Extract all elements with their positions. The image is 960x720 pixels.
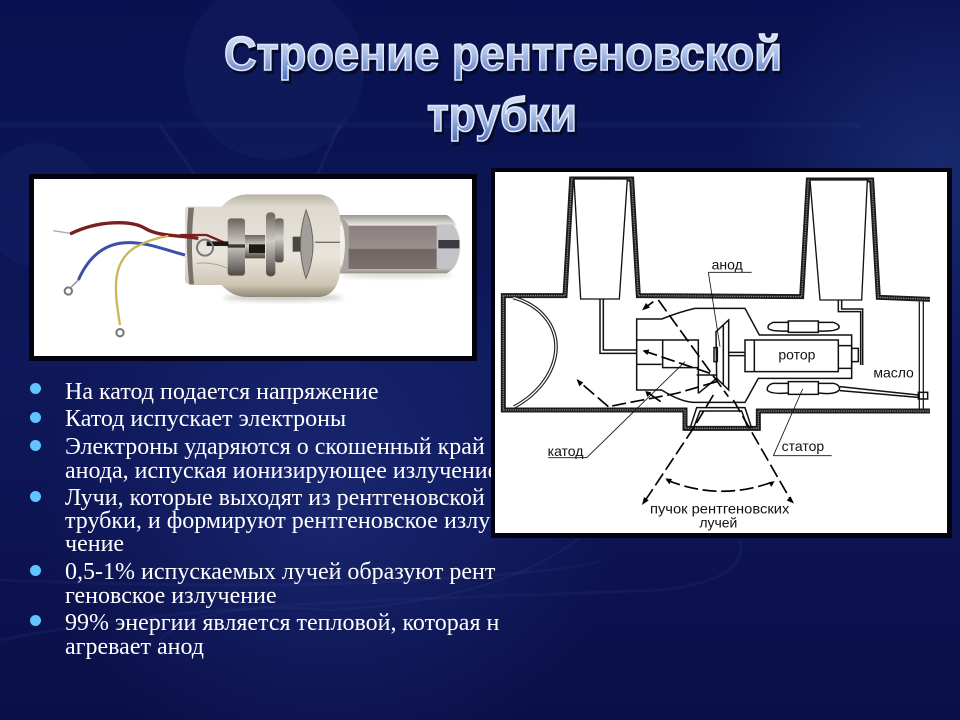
labels: пучок рентгеновских [650, 500, 789, 516]
bullet 2: Катод испускает электроны [65, 406, 346, 432]
bullet 6: агревает анод [65, 634, 204, 660]
cable sockets [574, 179, 867, 300]
bullet 5: геновское излучение [65, 583, 277, 609]
inner tube and components [600, 299, 928, 428]
title [224, 28, 784, 145]
labels: анод [712, 256, 743, 272]
bullet 3: Электроны ударяются о скошенный край [65, 434, 485, 460]
main glass body [185, 194, 340, 297]
bullet 1: На катод подается напряжение [65, 379, 378, 405]
bullet 6: 99% энергии является тепловой, которая н [65, 610, 499, 636]
bullet 4: трубки, и формируют рентгеновское излу [65, 508, 490, 534]
bullet 3: анода, испуская ионизирующее излучение [65, 458, 498, 484]
bullet list [30, 379, 499, 660]
labels: ротор [778, 346, 816, 362]
labels: статор [782, 438, 824, 454]
title: Строение рентгеновской [224, 28, 782, 81]
right glass [337, 215, 461, 273]
bullet 5: 0,5-1% испускаемых лучей образуют рент [65, 559, 495, 585]
labels: лучей [699, 514, 737, 530]
bullet 4: чение [65, 531, 124, 557]
wires [53, 223, 198, 336]
diagram: x-ray tube schematic [491, 168, 952, 538]
labels: катод [548, 443, 583, 459]
labels: масло [873, 364, 914, 380]
labels [548, 256, 914, 530]
bullet 4: Лучи, которые выходят из рентгеновской [65, 485, 485, 511]
title: трубки [429, 92, 579, 145]
title: трубки [427, 89, 577, 142]
bullet 3 [30, 434, 498, 484]
bullet 5 [30, 559, 496, 609]
arrowheads [577, 303, 794, 505]
bullet 4 [30, 485, 490, 557]
photo: x-ray tube [29, 174, 477, 361]
title: Строение рентгеновской [226, 31, 784, 84]
bullet 6 [30, 610, 499, 660]
x-ray beam and electron arrows [577, 300, 792, 503]
housing wall [503, 179, 930, 428]
leader lines [548, 272, 832, 458]
left reflector [513, 298, 556, 407]
